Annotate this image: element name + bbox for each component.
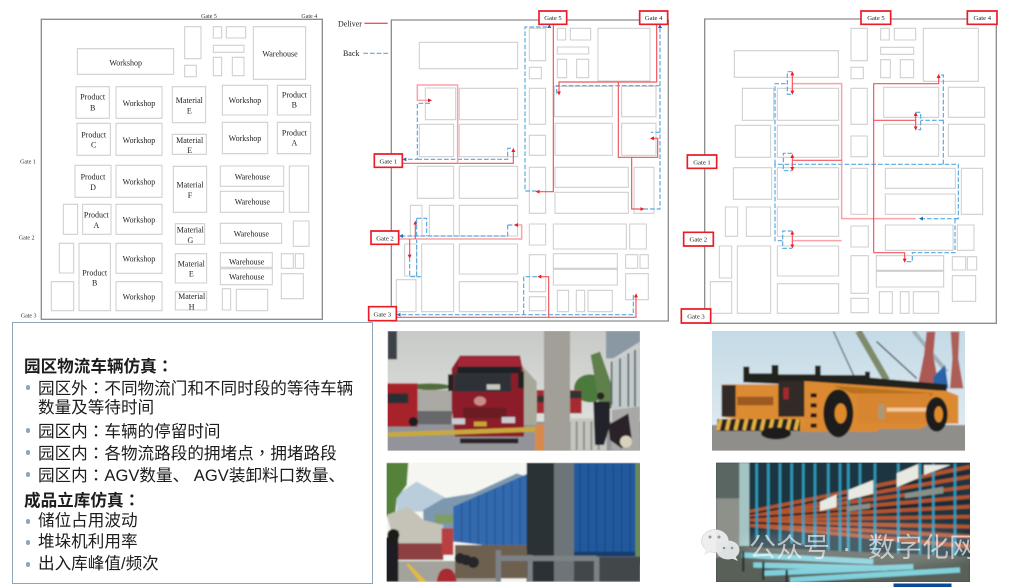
gate labels: Gate 3 [21,313,37,319]
bullet marker [26,519,30,524]
bullet: outside the park: 园区外：不同物流门和不同时段的等待车辆 [38,375,353,399]
gate 5: Gate 5 [544,15,562,22]
building: Material F [173,166,207,212]
building: Workshop [116,165,162,197]
gate labels [19,14,317,319]
bullet marker [26,385,30,390]
panel: site map with building labels [19,14,322,319]
building: Product B large: Product [82,268,108,277]
back routes (dashed blue) [775,72,958,262]
building: Workshop [222,122,268,154]
gate 3 [681,309,711,323]
building: Warehouse [220,223,282,243]
photo: automated high-bay warehouse racks [713,460,973,585]
watermark text: 公众号 [749,533,830,563]
building: Material E lower: Material [178,259,206,268]
building: Material H [175,292,207,311]
photo: orange AGV [710,328,968,453]
building: Material E lower: E [189,270,194,279]
building: Material F: F [188,191,193,200]
blue bar at bottom edge [894,584,952,587]
building: Product C: Product [81,131,107,140]
bullet marker [26,540,30,544]
bullet: AGV: 园区内：AGV数量、 AGV装卸料口数量、 [38,462,345,486]
building: Product A right: A [291,139,297,148]
building: Material F: Material [176,181,204,190]
building: Workshop: Workshop [123,254,155,263]
building: Workshop: Workshop [229,96,261,105]
gate 4: Gate 4 [974,15,992,22]
building: Product D [75,165,111,197]
building: Product A left [83,204,111,234]
building: Product A right [277,122,311,154]
building: Workshop: Workshop [123,178,155,187]
gate 3: Gate 3 [687,314,705,321]
heading: finished goods warehouse simulation: 成品立库仿真： [24,487,140,511]
site boundary [41,19,322,319]
building: Material E [172,87,206,123]
building: Material E: E [187,106,192,115]
building: Product D: D [90,183,96,192]
buildings [710,28,985,313]
building: Material G [175,224,205,245]
building: Workshop [116,204,162,234]
building: Warehouse: Warehouse [235,198,270,207]
building: Material E: Material [176,96,204,105]
building: Workshop: Workshop [123,99,155,108]
panel: truck routes map [338,11,668,321]
watermark: WeChat public account [702,524,980,568]
building: Warehouse top [253,27,306,79]
deliver routes (solid red) [396,24,658,317]
gate 5 [861,11,891,24]
building: Product B right: Product [282,91,308,100]
bullet: slot occupancy: 储位占用波动 [38,511,138,530]
bullet: stacker utilisation: 堆垛机利用率 [38,532,138,551]
panel: AGV routes map [681,11,997,323]
building: Material E small: Material [176,136,204,145]
photo: red trucks at gate [385,328,643,453]
building: Product A left: A [93,221,99,230]
building: Product B large [79,243,110,311]
site boundary [391,20,668,321]
gate labels: Gate 4 [301,14,317,20]
building: Material E lower [175,254,207,283]
building: Material H: Material [178,292,206,301]
building: Warehouse: Warehouse [229,257,265,266]
building: Workshop: Workshop [123,292,155,301]
gate 2 [371,231,399,244]
gate 5: Gate 5 [867,15,885,22]
buildings [396,28,656,312]
text block: simulation notes [12,322,373,584]
building: Material G: Material [177,226,205,235]
gate labels: Gate 2 [19,236,35,242]
back routes (dashed blue) [398,25,660,315]
building: Product B right: B [292,101,297,110]
bullet marker [26,428,30,432]
gate labels: Gate 1 [20,160,36,166]
building: Workshop [116,243,162,273]
building: Product B [76,87,109,118]
building: Product C: C [91,141,96,150]
building: Product A right: Product [282,129,308,138]
building: Product B large: B [92,278,97,287]
bullet continuation: 数量及等待时间 [38,398,154,417]
gate labels: Gate 5 [201,14,217,20]
gate 2: Gate 2 [690,237,707,244]
building: Material E small: E [187,146,192,155]
site boundary [705,19,996,323]
gate 1 [374,154,402,167]
watermark text: · [842,533,851,563]
gate 1 [687,155,717,168]
building: Product C [77,123,110,155]
building: Workshop [116,123,162,155]
bullet marker [26,450,30,454]
gate 4 [967,11,997,24]
gate 1: Gate 1 [693,159,711,166]
gate 4 [640,11,668,24]
legend: deliver and back: Back [343,49,359,58]
building: Workshop: Workshop [123,216,155,225]
building: Workshop [116,87,162,118]
bullet: dwell time: 园区内：车辆的停留时间 [38,418,221,442]
building: Product A left: Product [84,211,110,220]
legend: deliver and back [338,19,388,58]
gate 3 [369,307,396,321]
building: Workshop top [77,49,174,74]
gate 3: Gate 3 [374,311,392,318]
watermark text: 数字化网 [868,533,976,563]
building: Workshop [222,85,268,115]
gate 2: Gate 2 [376,235,394,242]
building: Material G: G [187,236,193,245]
building: Warehouse [220,191,284,212]
bullet marker [26,472,30,476]
gate 1: Gate 1 [380,158,397,165]
building: Warehouse [220,166,284,186]
building: Material E small [172,134,206,155]
building: Product B: B [90,104,95,113]
unlabelled buildings [51,27,309,311]
legend: deliver and back: Deliver [338,19,362,28]
building: Product B: Product [80,93,106,102]
bullet: inbound/outbound peak: 出入库峰值/频次 [38,554,159,573]
gate 2 [684,232,713,246]
bullet marker [26,562,30,566]
building: Warehouse top: Warehouse [262,49,298,58]
icon: WeChat bubbles [702,530,740,561]
building: Product D: Product [81,173,106,182]
bullet: congestion: 园区内：各物流路段的拥堵点，拥堵路段 [38,440,337,464]
heading: park logistics vehicle simulation: 园区物流车辆仿真： [24,353,173,377]
building: Warehouse [220,253,272,267]
building: Workshop: Workshop [123,136,155,145]
building: Warehouse: Warehouse [229,272,265,281]
building: Material H: H [189,302,195,311]
building: Workshop top: Workshop [109,58,142,67]
building: Warehouse: Warehouse [235,173,270,182]
deliver routes (solid red) [792,72,939,262]
building: Warehouse [220,269,272,285]
gate 4: Gate 4 [645,15,663,22]
photo: blue container truck [385,460,642,585]
building: Workshop [116,282,162,311]
building: Warehouse: Warehouse [234,229,269,238]
building: Workshop: Workshop [229,134,261,143]
gate 5 [539,11,567,24]
building: Product B right [277,85,311,115]
